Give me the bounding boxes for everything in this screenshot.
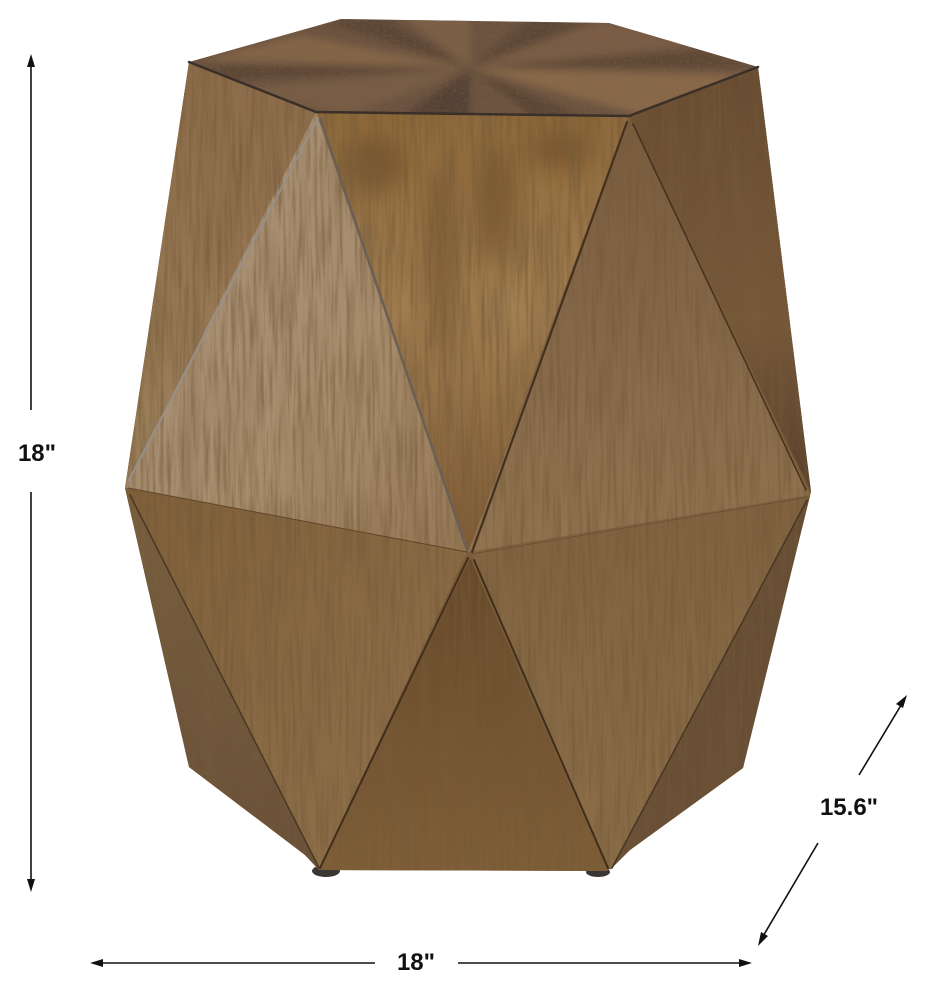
faceted wood table	[120, 15, 820, 875]
face: lower right	[470, 495, 810, 870]
icon: table foot left	[312, 865, 340, 877]
face: upper centre inverted triangle	[316, 112, 629, 552]
arrow: width right	[458, 959, 752, 967]
arrow: height lower	[27, 492, 35, 892]
dark streaks on centre face	[345, 132, 590, 360]
face: upper right triangle	[468, 116, 810, 552]
icon: table foot right	[586, 867, 610, 877]
label: height: 18"	[18, 440, 56, 467]
label: depth: 15.6"	[820, 794, 878, 821]
face: lower left	[125, 488, 467, 870]
face: upper far right	[629, 67, 811, 492]
arrow: height upper	[27, 54, 35, 410]
arrow: depth upper	[859, 695, 907, 775]
face: lower far right	[610, 495, 810, 870]
face: upper far left	[125, 62, 316, 488]
table top	[191, 19, 756, 115]
wood grain texture	[120, 60, 820, 875]
arrow: depth lower	[758, 843, 818, 946]
label: width: 18"	[397, 949, 435, 976]
table silhouette base	[125, 62, 811, 871]
facet edges	[128, 62, 808, 868]
face: lower far left	[125, 488, 319, 870]
arrow: width left	[90, 959, 375, 967]
face: lower centre triangle	[319, 558, 607, 871]
face: upper left triangle	[125, 112, 467, 552]
